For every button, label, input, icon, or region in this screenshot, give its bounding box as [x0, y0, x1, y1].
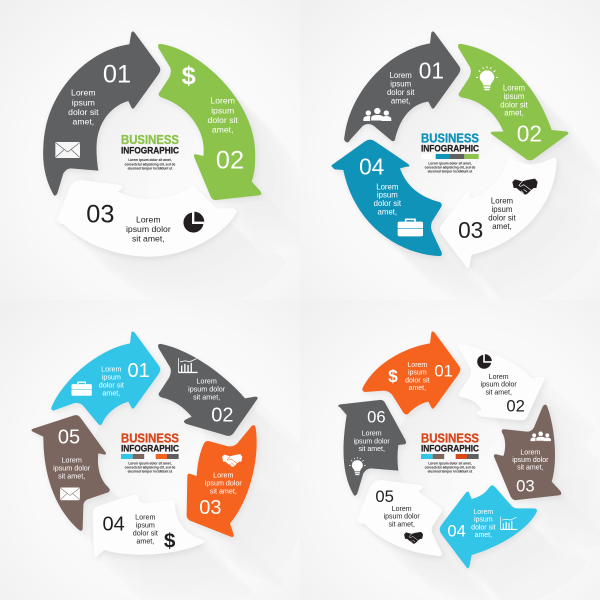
center title: [121, 431, 179, 473]
center title: [421, 431, 479, 473]
arrow 02: [158, 44, 261, 200]
arrow 01: 01: [103, 60, 131, 88]
arrow 02: dolor sit: [500, 100, 529, 109]
arrow 03: ipsum dolor: [126, 224, 171, 234]
arrow 03: [440, 158, 557, 268]
arrow 06: Lorem: [362, 431, 382, 438]
arrow 05: ipsum dolor: [53, 464, 91, 472]
arrow 02: [158, 344, 258, 436]
arrow 02: dolor sit: [208, 115, 238, 125]
arrow 03: ipsum dolor: [205, 480, 242, 488]
arrow 01: Lorem: [71, 88, 96, 98]
arrow 01: 01: [128, 360, 150, 382]
arrow 04: 04: [103, 513, 125, 535]
arrow 05: [31, 415, 110, 531]
arrow 04: dolor sit: [471, 524, 496, 531]
arrow 05: sit amet,: [388, 521, 415, 528]
arrow 03: Lorem: [491, 197, 513, 206]
arrow 01: ipsum: [408, 370, 427, 377]
arrow 01: Lorem: [390, 71, 412, 80]
arrow 01: amet,: [102, 390, 120, 398]
arrow 04: [440, 485, 537, 568]
arrow 03: amet,: [492, 222, 512, 231]
center title: INFOGRAPHIC: [421, 144, 479, 154]
arrow 02: amet,: [212, 125, 233, 135]
arrow 01: Lorem: [407, 362, 427, 369]
arrow 05: 05: [375, 487, 394, 506]
arrow 05: Lorem: [392, 506, 412, 513]
arrow 01: dolor sit: [99, 382, 124, 390]
arrow 05: 05: [58, 427, 80, 449]
arrow 05: sit amet,: [58, 472, 85, 480]
arrow 02: sit amet,: [485, 389, 512, 396]
arrow 01: amet,: [409, 385, 426, 392]
arrow 01: ipsum: [390, 80, 411, 89]
arrow 02: ipsum dolor: [481, 382, 517, 389]
arrow 04: Lorem: [135, 513, 156, 521]
arrow 02: [458, 344, 545, 420]
arrow 04: $: [164, 529, 176, 552]
arrow 01: [51, 331, 160, 425]
arrow 04: amet,: [136, 537, 154, 545]
arrow 01: ipsum: [72, 97, 95, 107]
arrow 02: 02: [211, 405, 233, 427]
arrow 01: [43, 31, 160, 196]
center title: [421, 131, 479, 173]
center title: BUSINESS: [121, 133, 179, 147]
arrow 02: ipsum: [504, 92, 524, 101]
arrow 02: $: [182, 62, 196, 90]
arrow 03: ipsum: [492, 205, 512, 214]
panel: five-step cycle: [32, 331, 266, 570]
center title: Lorem ipsum dolor sit amet,: [128, 158, 172, 162]
panel: three-step cycle: [43, 31, 276, 272]
arrow 03: Lorem: [213, 472, 234, 480]
center title: consectetur adipisicing elit, sed do: [425, 165, 475, 169]
arrow 01: amet,: [73, 117, 94, 127]
arrow 02: 02: [506, 396, 525, 415]
arrow 02: ipsum dolor: [188, 386, 226, 394]
arrow 04: 04: [359, 154, 384, 180]
arrow 04: ipsum: [474, 517, 493, 524]
panel: six-step cycle: [338, 331, 576, 571]
center title: consectetur adipisicing elit, sed do: [125, 162, 175, 166]
arrow 04: Lorem: [376, 182, 398, 191]
arrow 03: dolor sit: [488, 213, 517, 222]
arrow 04: dolor sit: [374, 199, 402, 208]
arrow 06: 06: [367, 408, 386, 427]
arrow 05: [357, 480, 442, 556]
arrow 01: Lorem: [101, 366, 122, 374]
center title: INFOGRAPHIC: [121, 145, 179, 155]
center title: eiusmod tempor incididunt ut: [128, 166, 173, 170]
arrow 04: [93, 495, 205, 557]
center title: consectetur adipisicing elit, sed do: [425, 465, 475, 469]
arrow 04: Lorem: [473, 509, 493, 516]
arrow 03: [187, 425, 257, 537]
center title: BUSINESS: [421, 131, 479, 145]
arrow 02: amet,: [504, 109, 524, 118]
arrow 03: [494, 405, 561, 500]
arrow 06: [338, 400, 406, 496]
arrow 02: sit amet,: [193, 394, 220, 402]
arrow 01: [362, 331, 460, 415]
arrow 04: amet,: [475, 532, 492, 539]
arrow 04: ipsum: [377, 191, 398, 200]
arrow 03: 03: [516, 477, 535, 496]
center title: Lorem ipsum dolor sit amet,: [128, 461, 172, 465]
arrow 03: 03: [86, 200, 114, 228]
arrow 02: 02: [517, 121, 542, 147]
center title: Lorem ipsum dolor sit amet,: [428, 161, 472, 165]
center title: eiusmod tempor incididunt ut: [428, 169, 473, 173]
arrow 03: ipsum dolor: [512, 457, 549, 464]
center title: BUSINESS: [121, 431, 179, 445]
arrow 01: ipsum: [102, 374, 121, 382]
arrow 03: sit amet,: [517, 465, 544, 472]
arrow 06: sit amet,: [358, 446, 385, 453]
arrow 02: Lorem: [489, 374, 509, 381]
arrow 03: Lorem: [136, 214, 161, 224]
arrow 01: dolor sit: [405, 377, 430, 384]
center title: eiusmod tempor incididunt ut: [428, 469, 473, 473]
arrow 02: Lorem: [503, 83, 525, 92]
panel: four-step cycle: [332, 31, 575, 271]
arrow 01: dolor sit: [387, 88, 415, 97]
center title: [121, 133, 179, 170]
arrow 02: 02: [216, 146, 244, 174]
arrow 03: 03: [199, 497, 221, 519]
arrow 03: sit amet,: [210, 488, 237, 496]
arrow 03: Lorem: [520, 449, 540, 456]
arrow 04: 04: [447, 522, 466, 541]
arrow 02: Lorem: [210, 96, 235, 106]
arrow 04: ipsum: [136, 521, 155, 529]
arrow 01: amet,: [391, 96, 410, 105]
arrow 05: ipsum dolor: [384, 514, 420, 521]
arrow 04: [331, 140, 442, 256]
arrow 01: [344, 31, 460, 142]
arrow 06: ipsum dolor: [354, 438, 390, 445]
arrow 01: 01: [419, 58, 444, 84]
arrow 01: dolor sit: [68, 107, 99, 117]
arrow 03: [57, 180, 237, 257]
arrow 05: Lorem: [62, 456, 82, 464]
arrow 04: dolor sit: [133, 529, 158, 537]
center title: BUSINESS: [421, 431, 479, 445]
arrow 03: sit amet,: [132, 234, 165, 244]
center title: Lorem ipsum dolor sit amet,: [428, 461, 472, 465]
arrow 02: ipsum: [211, 105, 234, 115]
center title: INFOGRAPHIC: [121, 444, 179, 454]
arrow 01: $: [388, 366, 398, 386]
center title: eiusmod tempor incididunt ut: [128, 469, 173, 473]
arrow 02: Lorem: [197, 378, 217, 386]
arrow 01: 01: [434, 361, 453, 380]
arrow 04: amet,: [378, 208, 397, 217]
center title: INFOGRAPHIC: [421, 444, 479, 454]
arrow 02: [458, 44, 568, 160]
arrow 03: 03: [458, 217, 483, 243]
center title: consectetur adipisicing elit, sed do: [125, 465, 175, 469]
